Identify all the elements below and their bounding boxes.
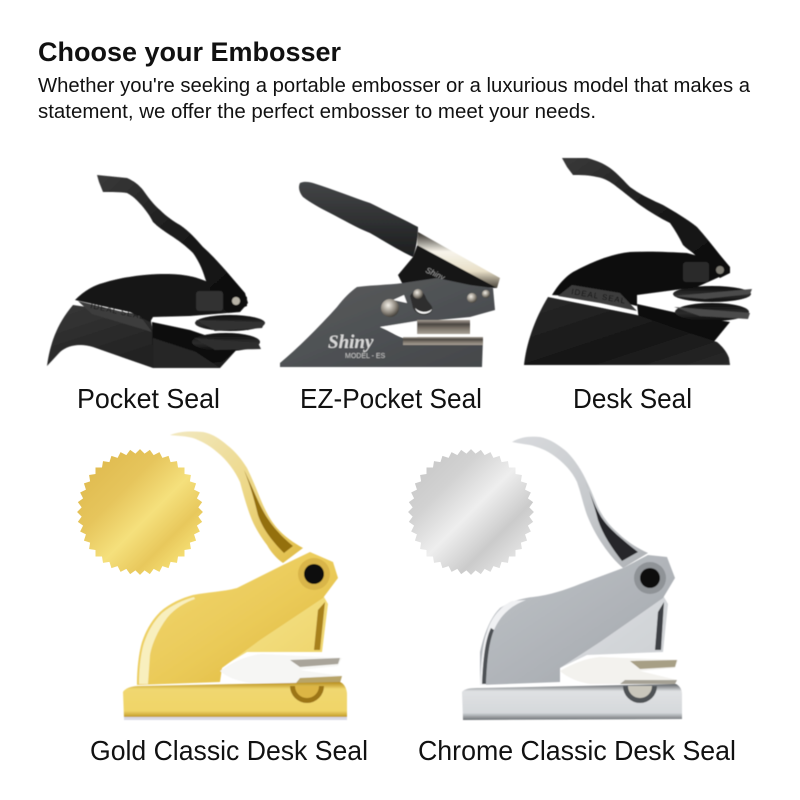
handle: [97, 175, 248, 313]
base: [123, 682, 347, 718]
intro text: Whether you're seeking a portable embosser or a luxurious model that makes a: [38, 75, 751, 97]
title: Choose your Embosser: [38, 37, 341, 67]
label: pocket seal: Pocket Seal: [77, 383, 220, 414]
panel: gold classic desk seal embosser: [123, 431, 347, 720]
pivot: [716, 266, 724, 274]
label: gold classic desk seal: Gold Classic Desk Seal: [90, 735, 368, 766]
handle dark stripe: [584, 478, 638, 561]
intro text: [38, 75, 751, 123]
screw: [467, 293, 477, 303]
screw: [413, 289, 423, 299]
base: [524, 297, 730, 365]
intro text: statement, we offer the perfect embosser to meet your needs.: [38, 101, 596, 123]
rubber grip: [299, 182, 418, 257]
panel: chrome classic desk seal embosser: [462, 437, 682, 720]
silver foil seal: [407, 448, 535, 576]
arm label plate: IDEAL SEAL: [90, 301, 146, 321]
pivot hole: [634, 562, 666, 594]
grey body: [280, 278, 495, 367]
pivot hole: [298, 558, 330, 590]
engraved model: MODEL - ES: [345, 353, 386, 360]
screw: [482, 290, 490, 298]
handle: [170, 431, 303, 563]
panel: ez-pocket seal embosser: [280, 182, 500, 367]
lower jaw wedge: [560, 590, 668, 668]
engraved plate brand: Shiny: [424, 266, 447, 283]
small slot: [393, 295, 407, 303]
base shadow: [124, 717, 347, 720]
jaw opening: [380, 321, 417, 337]
arm label plate: [78, 301, 152, 332]
handle: [562, 158, 730, 278]
pivot: [232, 297, 240, 305]
engraved brand: Shiny: [328, 332, 374, 353]
plate: IDEAL SEAL: [571, 287, 627, 306]
upper die: [417, 320, 470, 334]
kidney slot: [410, 291, 432, 315]
upper arm: [552, 252, 730, 306]
handle: [512, 437, 648, 568]
handle dark stripe: [244, 470, 293, 553]
dark stripe: [655, 602, 664, 650]
edge highlight: [480, 600, 526, 685]
base: [462, 684, 682, 720]
mechanism: [683, 262, 709, 282]
panel: pocket seal embosser: [47, 175, 265, 368]
body edge highlight: [139, 597, 195, 684]
base roller: [623, 686, 657, 703]
stamp discs: [673, 286, 752, 321]
upper arm: [75, 274, 247, 322]
lower base: [47, 305, 240, 368]
dark inner stripe: [314, 602, 325, 650]
base roller: [290, 686, 324, 703]
black plate: [398, 238, 497, 288]
plate: [558, 285, 637, 311]
mechanism under arm: [637, 304, 730, 344]
panel: desk seal embosser: [524, 158, 752, 365]
mechanism strip: [152, 322, 240, 368]
main body: [137, 552, 338, 685]
label: ez-pocket seal: EZ-Pocket Seal: [300, 383, 482, 414]
label: desk seal: Desk Seal: [573, 383, 692, 414]
label: chrome classic desk seal: Chrome Classic Desk Seal: [418, 735, 736, 766]
main body: [480, 555, 675, 685]
stamp plates: [220, 654, 342, 683]
chrome strip: [417, 232, 500, 288]
stamp discs: [192, 315, 265, 351]
mechanism block: [196, 291, 223, 311]
screw large: [381, 299, 399, 317]
gold foil seal: [76, 448, 204, 576]
lower jaw wedge: [220, 590, 328, 668]
lower die: [403, 337, 483, 345]
stamp plates: [560, 657, 678, 684]
